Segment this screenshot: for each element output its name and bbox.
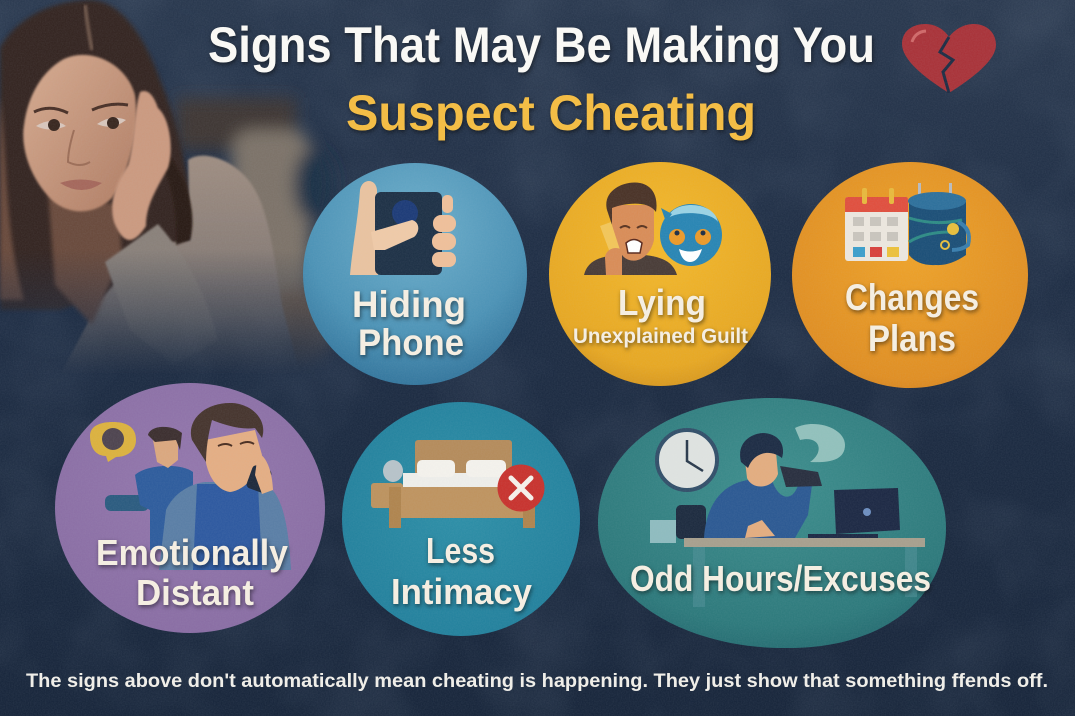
icon: bed with red cross xyxy=(371,440,544,528)
label: Odd Hours/Excuses: Odd Hours/Excuses xyxy=(630,558,931,599)
panel: lying xyxy=(549,162,771,386)
sweater xyxy=(69,154,290,364)
photo: worried woman resting her head on her hand xyxy=(0,0,336,375)
label: Less Intimacy xyxy=(391,530,532,612)
label: Hiding Phone: Phone xyxy=(358,322,464,363)
label: Changes Plans: Changes xyxy=(845,277,979,318)
icon: calendar and container xyxy=(845,183,969,265)
blurred room behind the woman xyxy=(176,98,336,370)
icon: two men, one on phone xyxy=(90,403,291,570)
disclaimer footer: The signs above don't automatically mean cheating is happening. They just show that something ffends off. xyxy=(26,671,1048,692)
icon: broken heart xyxy=(902,24,996,93)
label: Less Intimacy: Intimacy xyxy=(391,571,532,612)
label: Emotionally Distant: Distant xyxy=(136,572,254,613)
label: Hiding Phone xyxy=(352,284,466,363)
facial features xyxy=(34,104,128,190)
label: Lying, Unexplained Guilt: Lying xyxy=(618,282,706,323)
neck and chest xyxy=(48,190,122,325)
label: Changes Plans xyxy=(845,277,979,359)
label: Less Intimacy: Less xyxy=(426,530,495,571)
face xyxy=(23,55,136,211)
label: Lying, Unexplained Guilt: Unexplained Guilt xyxy=(573,325,748,348)
panel: emotionally distant xyxy=(55,383,325,633)
hair xyxy=(0,0,193,310)
panel: less intimacy xyxy=(342,402,580,636)
hair strands over sweater xyxy=(166,158,194,246)
icon: man on phone with smiling mask xyxy=(584,182,722,275)
title line 1: Signs That May Be Making You xyxy=(208,17,875,73)
label: Lying, Unexplained Guilt xyxy=(573,282,748,348)
sleeve xyxy=(104,223,174,286)
icon: hand hiding phone xyxy=(350,181,456,275)
label: Hiding Phone: Hiding xyxy=(352,284,466,325)
label: Emotionally Distant xyxy=(96,532,288,613)
icon: man working late at desk xyxy=(650,424,925,607)
label: Emotionally Distant: Emotionally xyxy=(96,532,288,573)
panel: hiding phone xyxy=(303,163,527,385)
panel: changes plans xyxy=(792,162,1028,388)
label: Changes Plans: Plans xyxy=(868,318,956,359)
title xyxy=(208,17,875,141)
title line 2: Suspect Cheating xyxy=(346,85,756,141)
hand xyxy=(112,91,171,240)
panel: odd hours and excuses xyxy=(598,398,946,648)
